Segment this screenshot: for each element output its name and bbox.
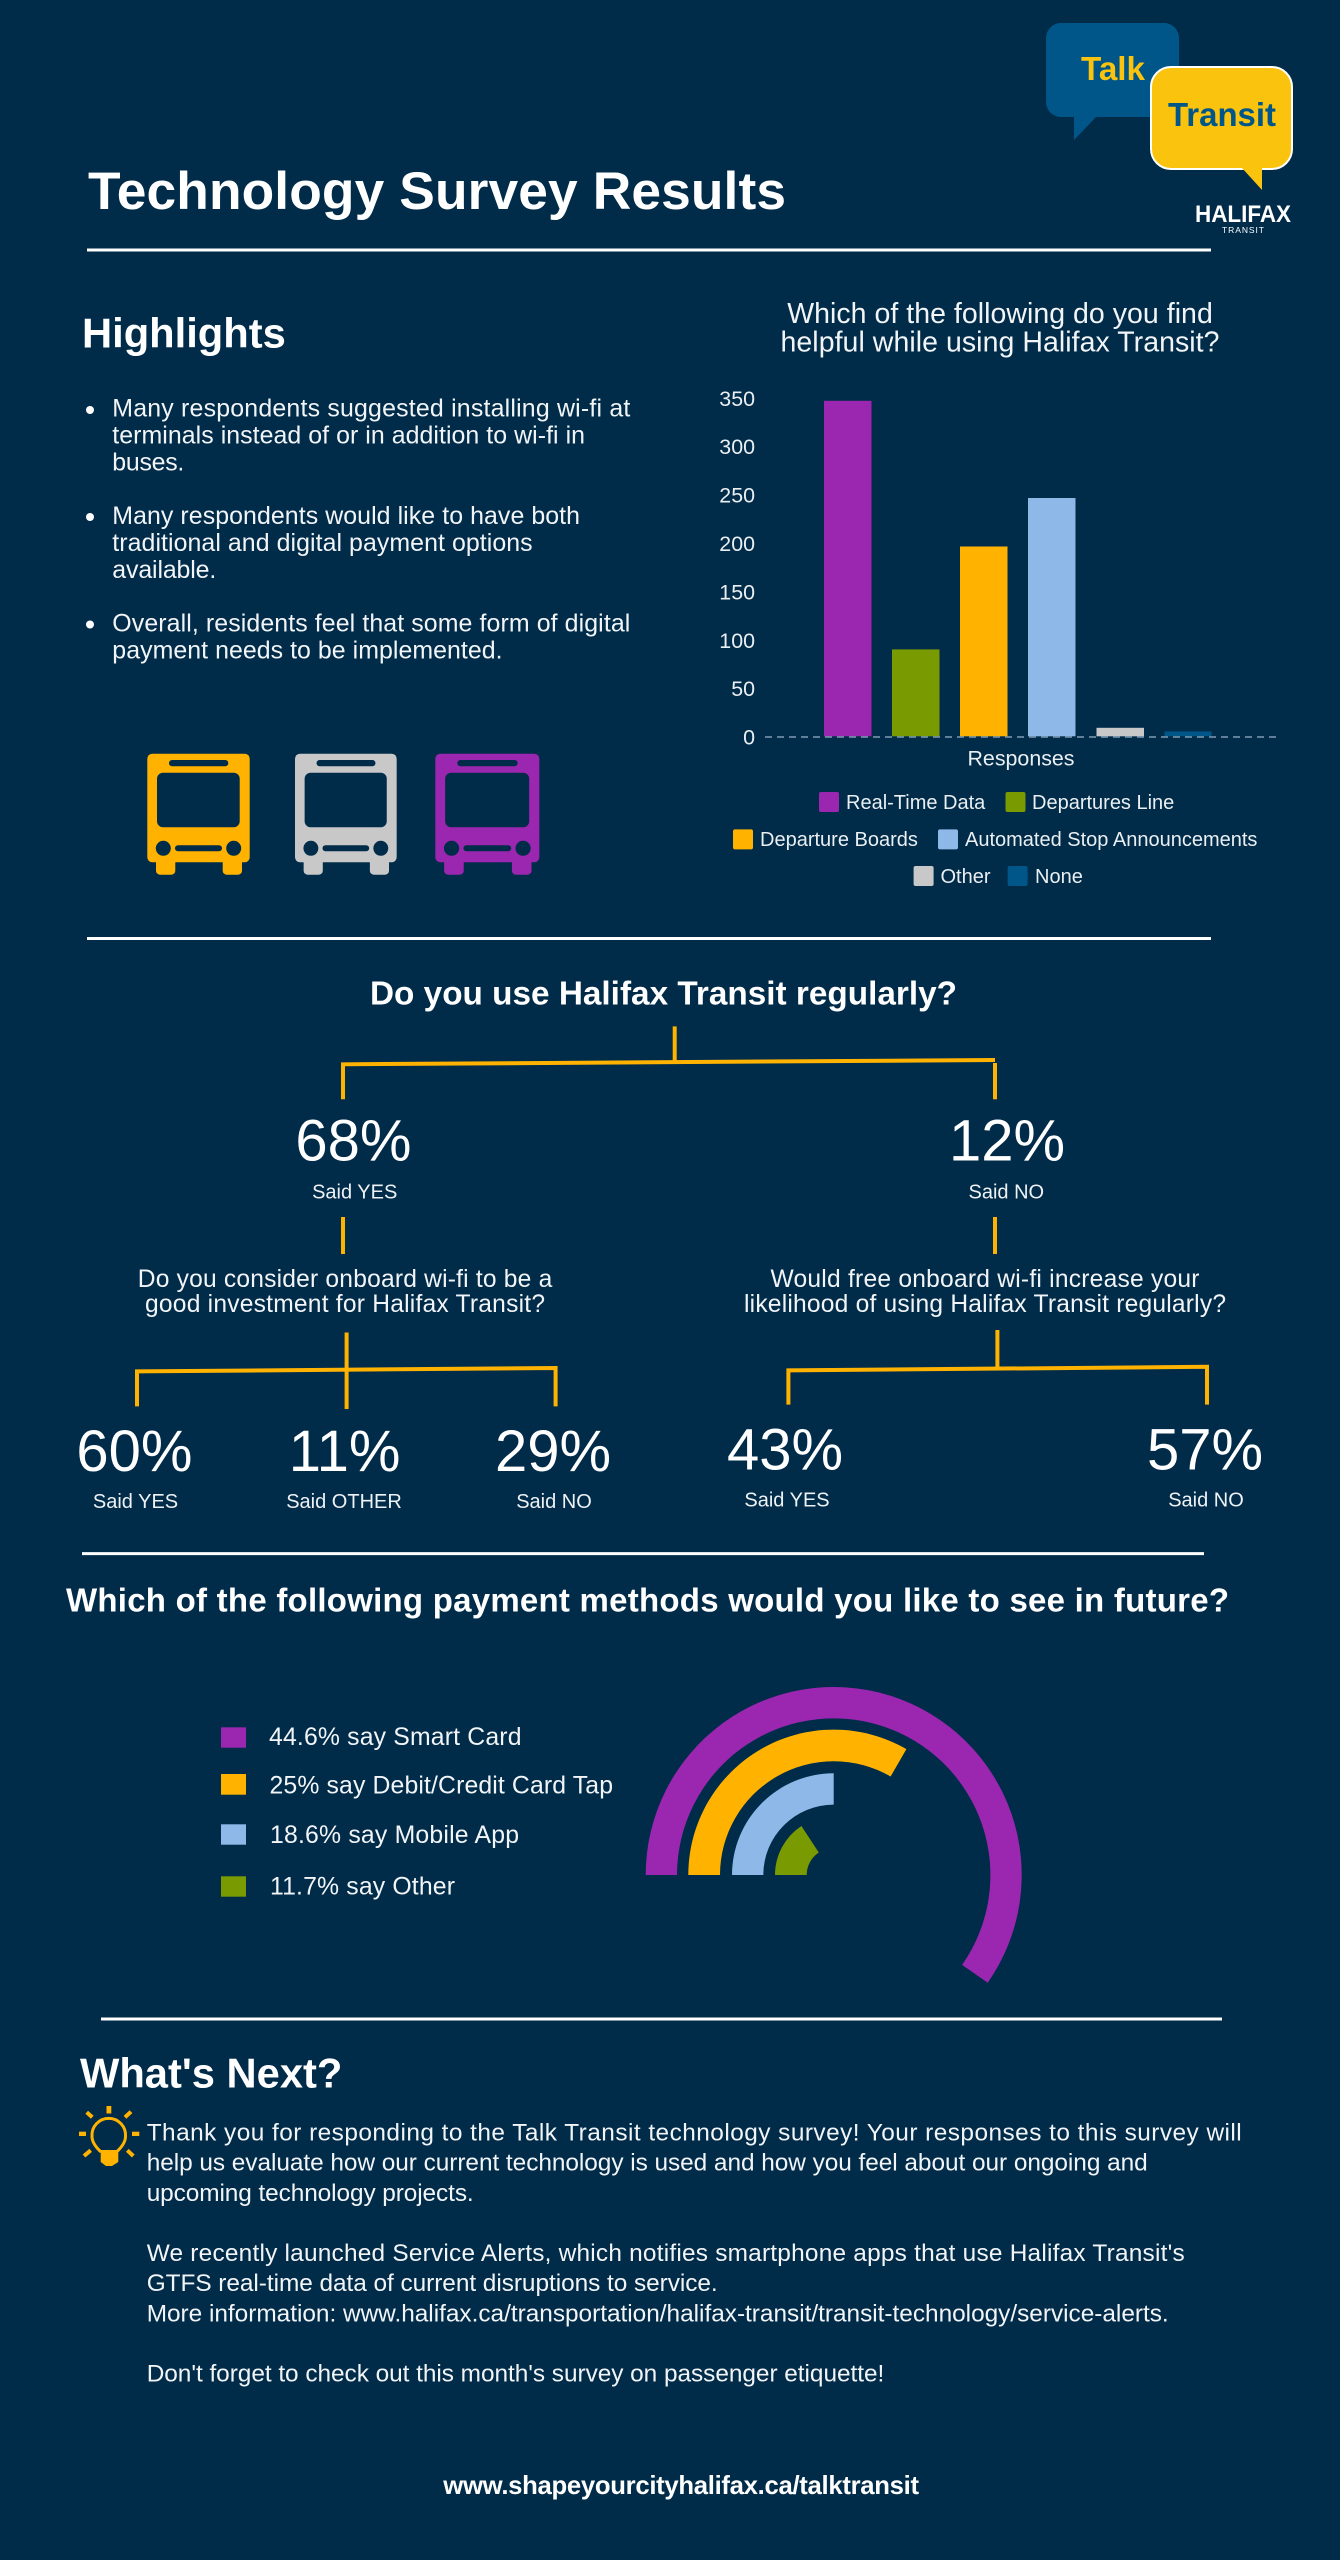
icon: grey bus: [295, 754, 397, 875]
body text: [147, 2120, 1242, 2388]
body text: More information: www.halifax.ca/transportation/halifax-transit/transit-technology/service-alerts.: [147, 2300, 1169, 2327]
y axis labels: 0: [743, 726, 755, 750]
connector: yes to question: [341, 1217, 345, 1254]
payment legend: 44.6% say Smart Card: [269, 1724, 522, 1751]
chart heading: [780, 298, 1220, 358]
payment legend: 18.6% say Mobile App: [270, 1822, 519, 1849]
stat: 12 percent no: [949, 1108, 1065, 1204]
connector: no to question: [993, 1217, 997, 1254]
stat: 68 percent yes: [295, 1108, 411, 1204]
chart legend: Automated Stop Announcements: [965, 829, 1257, 851]
chart heading: helpful while using Halifax Transit?: [780, 326, 1220, 358]
logo: Halifax Transit wordmark: TRANSIT: [1222, 225, 1264, 235]
connector: top split: [343, 1026, 995, 1099]
bullet list: available.: [112, 556, 216, 584]
icon: light bulb: [79, 2106, 139, 2166]
stat: 68 percent yes: 68%: [295, 1108, 411, 1174]
stat: 29 percent no: 29%: [495, 1419, 611, 1484]
body text: upcoming technology projects.: [147, 2180, 474, 2207]
y axis labels: 350: [719, 387, 755, 411]
stat: 11 percent other: [286, 1419, 402, 1513]
payment legend: [221, 1724, 613, 1900]
logo: Talk Transit speech bubbles: Talk: [1081, 50, 1146, 87]
panel: helpful features bar chart: [719, 298, 1277, 888]
stat: 43 percent yes: 43%: [727, 1418, 843, 1483]
stat: 12 percent no: 12%: [949, 1108, 1065, 1174]
logo: Halifax Transit wordmark: HALIFAX: [1195, 201, 1291, 228]
logo: Talk Transit speech bubbles: Transit: [1168, 96, 1276, 133]
bullet list: terminals instead of or in addition to wi-fi in: [112, 422, 585, 450]
panel: payment methods: [66, 1582, 1229, 1983]
stat: 12 percent no: Said NO: [969, 1182, 1044, 1204]
y axis labels: [719, 387, 755, 750]
question: good investment: [138, 1266, 553, 1318]
stat: 57 percent no: [1147, 1418, 1263, 1511]
stat: 11 percent other: Said OTHER: [286, 1491, 402, 1513]
panel: highlights: [82, 310, 630, 875]
stat: 57 percent no: 57%: [1147, 1418, 1263, 1483]
heading: highlights: Highlights: [82, 310, 286, 357]
stat: 60 percent yes: [76, 1419, 192, 1513]
stat: 29 percent no: [495, 1419, 611, 1513]
y axis labels: 50: [731, 677, 755, 701]
payment legend: 11.7% say Other: [270, 1873, 455, 1900]
y axis labels: 200: [719, 532, 755, 556]
chart legend: Departure Boards: [760, 829, 918, 851]
y axis labels: 100: [719, 629, 755, 653]
connector: right two-way split: [788, 1330, 1207, 1405]
body text: Thank you for responding to the Talk Transit technology survey! Your responses to this survey will: [147, 2120, 1242, 2147]
title: Technology Survey Results: [88, 162, 786, 221]
bullet list: [86, 395, 630, 665]
chart legend: None: [1035, 866, 1083, 888]
question: likelihood of use: Would free onboard wi-fi increase your: [770, 1266, 1200, 1293]
body text: We recently launched Service Alerts, which notifies smartphone apps that use Halifax Transit's: [147, 2240, 1185, 2267]
y axis labels: 150: [719, 580, 755, 604]
question: good investment: good investment for Halifax Transit?: [145, 1291, 545, 1318]
bullet list: Overall, residents feel that some form of digital: [112, 610, 630, 638]
payment legend: 25% say Debit/Credit Card Tap: [270, 1773, 613, 1800]
question: likelihood of use: [744, 1266, 1226, 1318]
body text: GTFS real-time data of current disruptions to service.: [147, 2270, 718, 2297]
bullet list: payment needs to be implemented.: [112, 637, 503, 665]
body text: help us evaluate how our current technology is used and how you feel about our ongoing and: [147, 2150, 1148, 2177]
x axis label: Responses: [967, 747, 1075, 771]
radial bar chart: [646, 1687, 1022, 1983]
chart legend: [733, 792, 1257, 888]
panel: what's next: [79, 2050, 1242, 2388]
chart legend: Other: [940, 866, 991, 888]
y axis labels: 250: [719, 484, 755, 508]
panel: regular use decision tree: [76, 976, 1263, 1513]
stat: 60 percent yes: 60%: [76, 1419, 192, 1484]
logo: Talk Transit speech bubbles: [1046, 23, 1292, 190]
bullet list: buses.: [112, 449, 184, 477]
heading: what's next: What's Next?: [80, 2050, 342, 2097]
bullet list: Many respondents would like to have both: [112, 502, 580, 530]
connector: left three-way split: [137, 1332, 556, 1409]
chart heading: Which of the following do you find: [787, 298, 1213, 330]
bars: [824, 401, 1212, 736]
y axis labels: 300: [719, 435, 755, 459]
stat: 29 percent no: Said NO: [516, 1491, 592, 1513]
stat: 11 percent other: 11%: [289, 1419, 400, 1484]
footer url: www.shapeyourcityhalifax.ca/talktransit: [442, 2472, 919, 2500]
chart legend: Real-Time Data: [846, 792, 986, 814]
stat: 43 percent yes: Said YES: [744, 1489, 830, 1511]
stat: 60 percent yes: Said YES: [93, 1491, 178, 1513]
tree heading: Do you use Halifax Transit regularly?: [370, 976, 957, 1013]
bullet list: Many respondents suggested installing wi-fi at: [112, 395, 630, 423]
chart legend: Departures Line: [1032, 792, 1174, 814]
question: good investment: Do you consider onboard wi-fi to be a: [138, 1266, 553, 1293]
body text: Don't forget to check out this month's survey on passenger etiquette!: [147, 2361, 884, 2388]
icon: amber bus: [147, 754, 250, 875]
question: likelihood of use: likelihood of using Halifax Transit regularly?: [744, 1291, 1226, 1318]
stat: 57 percent no: Said NO: [1168, 1489, 1244, 1511]
icon: purple bus: [435, 754, 539, 875]
bullet list: traditional and digital payment options: [112, 529, 533, 557]
stat: 68 percent yes: Said YES: [312, 1182, 397, 1204]
payment heading: Which of the following payment methods would you like to see in future?: [66, 1582, 1229, 1619]
stat: 43 percent yes: [727, 1418, 843, 1511]
